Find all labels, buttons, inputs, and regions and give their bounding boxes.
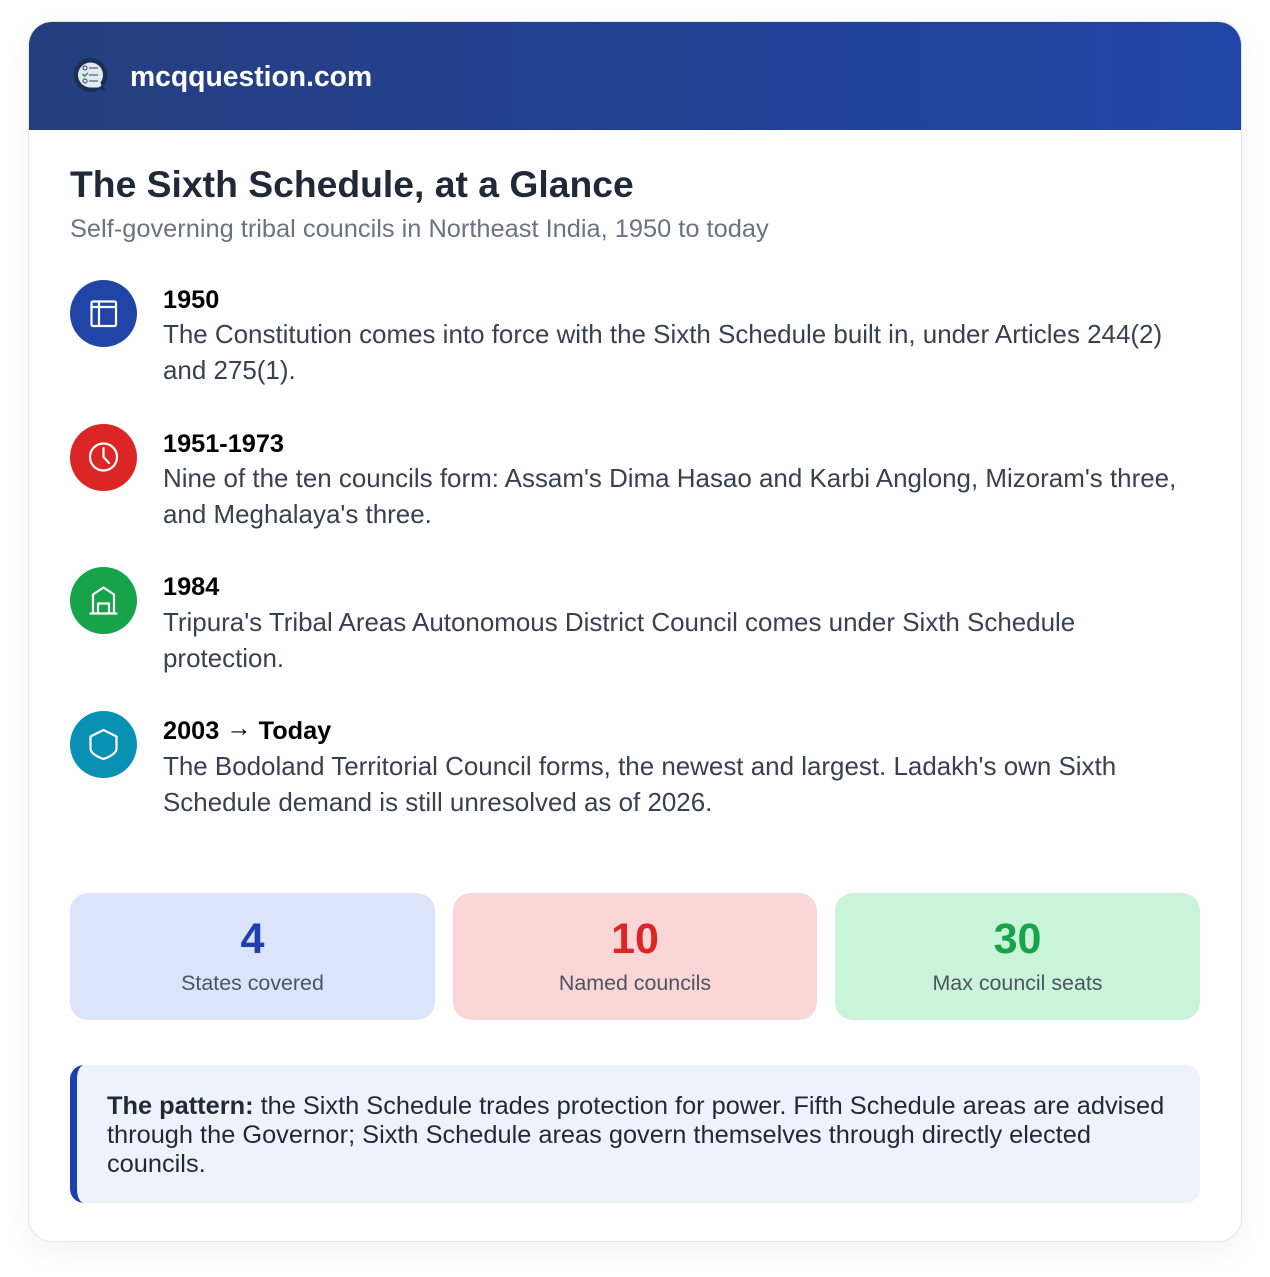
event: 1951-1973: 1951-1973	[163, 430, 284, 458]
event: 1950: and 275(1).	[163, 357, 296, 385]
event: 1984	[163, 573, 1075, 673]
event: 1951-1973: Nine of the ten councils form: Assam's Dima Hasao and Karbi Anglong, Mizoram's three,	[163, 465, 1176, 493]
event: 1950: The Constitution comes into force with the Sixth Schedule built in, under Articles 244(2)	[163, 321, 1162, 349]
brand name: mcqquestion.com	[130, 60, 372, 92]
icon: clock	[70, 424, 137, 491]
event: 1950: 1950	[163, 286, 219, 314]
subtitle: Self-governing tribal councils in Northeast India, 1950 to today	[70, 215, 769, 243]
title: The Sixth Schedule, at a Glance	[70, 163, 634, 205]
stat: states covered: States covered	[181, 971, 324, 995]
event: 1950	[163, 286, 1162, 385]
icon: constitution panel	[70, 280, 137, 347]
stat: states covered: 4	[241, 915, 264, 963]
callout text: The pattern: the Sixth Schedule trades protection for power. Fifth Schedule areas are advised	[107, 1092, 1164, 1120]
stat: max council seats: 30	[994, 915, 1041, 963]
callout text: through the Governor; Sixth Schedule areas govern themselves through directly elected	[107, 1121, 1091, 1149]
event: 2003 to today: Schedule demand is still unresolved as of 2026.	[163, 789, 712, 817]
event: 1951-1973: and Meghalaya's three.	[163, 501, 432, 529]
stat: named councils	[453, 893, 817, 1020]
icon: building	[70, 567, 137, 634]
callout: the pattern	[70, 1065, 1200, 1203]
stat: states covered	[70, 893, 435, 1020]
event: 1984: protection.	[163, 645, 284, 673]
header banner	[29, 22, 1241, 130]
event: 2003 to today: The Bodoland Territorial Council forms, the newest and largest. Ladakh's own Sixth	[163, 753, 1116, 781]
stat: max council seats: Max council seats	[932, 971, 1102, 995]
event: 1984: Tripura's Tribal Areas Autonomous District Council comes under Sixth Schedule	[163, 609, 1075, 637]
stat: max council seats	[835, 893, 1200, 1020]
stat: named councils: 10	[611, 915, 659, 963]
stat: named councils: Named councils	[559, 971, 711, 995]
event: 1984: 1984	[163, 573, 219, 601]
icon: shield	[70, 711, 137, 778]
event: 1951-1973	[163, 430, 1176, 529]
event: 2003 to today: 2003 → Today	[163, 714, 331, 745]
callout text	[107, 1092, 1164, 1178]
callout text: councils.	[107, 1150, 206, 1178]
event: 2003 to today	[163, 714, 1116, 817]
logo icon	[74, 58, 108, 92]
